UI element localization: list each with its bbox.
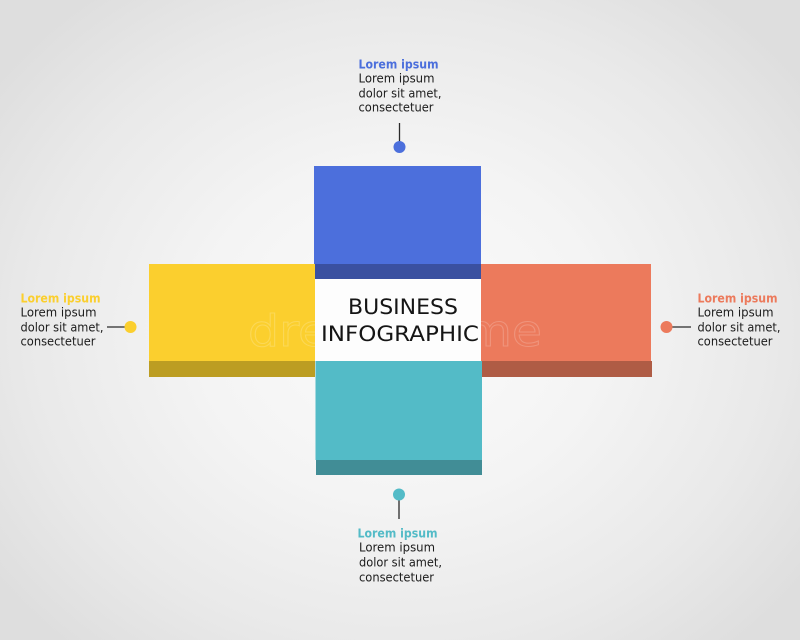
callout body: consectetuer bbox=[359, 570, 435, 586]
callout body: Lorem ipsum bbox=[359, 540, 435, 556]
callout body bbox=[359, 540, 442, 586]
connector and dot bbox=[107, 321, 136, 333]
callout heading: Lorem ipsum bbox=[20, 290, 100, 306]
callout: left yellow bbox=[20, 290, 136, 350]
watermark: dreamstime bbox=[248, 306, 542, 357]
callout body: dolor sit amet, bbox=[358, 86, 442, 102]
callout: top blue bbox=[358, 56, 442, 153]
callout body: dolor sit amet, bbox=[20, 320, 104, 336]
panel: teal bottom block bbox=[316, 361, 482, 475]
panel: blue top block bbox=[314, 166, 481, 279]
callout body: Lorem ipsum bbox=[358, 72, 434, 86]
panel: yellow left block bbox=[149, 264, 315, 377]
callout body: consectetuer bbox=[358, 100, 434, 116]
callout body: Lorem ipsum bbox=[20, 306, 96, 320]
callout heading: Lorem ipsum bbox=[358, 56, 438, 72]
connector and dot bbox=[393, 488, 405, 519]
panel: center white block bbox=[315, 279, 481, 361]
callout body bbox=[698, 306, 780, 350]
callout body bbox=[358, 72, 442, 116]
callout: bottom teal bbox=[358, 488, 442, 586]
callout body: dolor sit amet, bbox=[698, 320, 780, 336]
callout: right orange bbox=[660, 290, 780, 350]
callout body: consectetuer bbox=[20, 334, 96, 350]
heading: business infographic: BUSINESS bbox=[348, 295, 458, 320]
connector and dot bbox=[394, 123, 406, 153]
callout body: dolor sit amet, bbox=[359, 556, 442, 570]
callout body bbox=[20, 306, 104, 350]
callout body: Lorem ipsum bbox=[698, 306, 774, 320]
heading: business infographic: INFOGRAPHIC bbox=[321, 322, 479, 347]
callout heading: Lorem ipsum bbox=[358, 526, 438, 540]
panel: orange right block bbox=[481, 264, 652, 377]
callout heading: Lorem ipsum bbox=[698, 290, 778, 306]
callout body: consectetuer bbox=[698, 334, 773, 350]
heading: business infographic bbox=[321, 295, 479, 347]
panel: cross diagram bbox=[149, 166, 652, 475]
connector and dot bbox=[660, 321, 691, 333]
